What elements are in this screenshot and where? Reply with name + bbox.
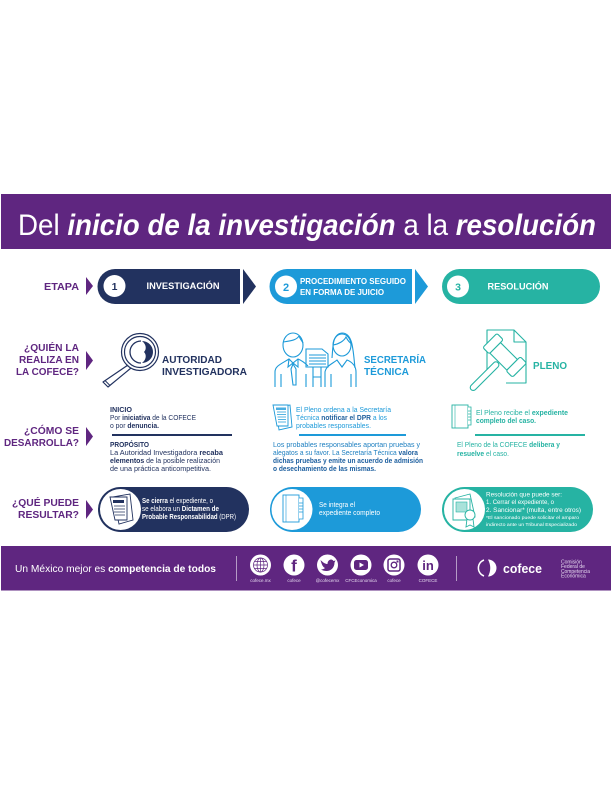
icon: linkedin: in	[422, 558, 434, 573]
row label: quién la realiza	[16, 341, 93, 378]
text block: los probables responsables: alegatos a su favor. La Secretaría Técnica valora	[273, 448, 419, 457]
text block: el pleno recibe: El Pleno recibe el expediente	[476, 408, 568, 417]
row label: quién la realiza: LA COFECE?	[16, 366, 79, 378]
icon: two officials with document	[275, 333, 356, 387]
text: comisión federal de competencia económica: Federal de	[561, 564, 585, 570]
stage 1 arrow: investigación: 1	[112, 281, 118, 293]
text block: propósito: de una práctica anticompetitiva.	[110, 464, 211, 473]
icon: twitter: @cofecemx	[316, 578, 340, 583]
label: pleno: PLENO	[533, 360, 567, 372]
icon: facebook	[284, 554, 304, 583]
stage 1 arrow: investigación	[98, 269, 256, 304]
logo: cofece	[478, 560, 542, 576]
icon: facebook: cofece	[287, 578, 301, 583]
result pill: resolución	[442, 487, 593, 532]
stage 2 arrow: procedimiento seguido en forma de juicio: 2	[283, 282, 289, 294]
divider: investigación	[112, 434, 232, 436]
icon: twitter	[316, 554, 340, 583]
text block: los probables responsables: Los probables responsables aportan pruebas y	[273, 440, 420, 449]
result pill: procedimiento: Se integra el	[319, 502, 355, 509]
text block: el pleno delibera: resuelve el caso.	[457, 449, 509, 458]
result pill: resolución: Resolución que puede ser:	[486, 492, 562, 498]
icon: instagram	[384, 554, 404, 583]
row label: qué puede resultar: ¿QUÉ PUEDE	[12, 496, 79, 509]
text block: los probables responsables	[273, 440, 423, 473]
text block: inicio: Por iniciativa de la COFECE	[110, 413, 196, 422]
row label: qué puede resultar	[12, 496, 93, 521]
icon: certificate with seal	[453, 494, 475, 527]
icon: youtube: CFCEconomica	[345, 578, 377, 583]
text block: el pleno delibera: El Pleno de la COFECE delibera y	[457, 440, 560, 449]
row label: cómo se desarrolla: ¿CÓMO SE	[24, 424, 79, 437]
stage 3 pill: resolución	[442, 269, 600, 304]
icon: document with gavel	[456, 330, 527, 404]
icon: facebook: f	[291, 556, 297, 576]
result pill: resolución: *El sancionado puede solicitar el amparo	[486, 515, 579, 521]
text block: el pleno delibera	[457, 440, 560, 458]
row label: etapa	[44, 277, 93, 295]
result pill: investigación: Probable Responsabilidad (DPR)	[142, 514, 236, 521]
title banner	[1, 194, 611, 249]
stage 2 arrow: procedimiento seguido en forma de juicio: PROCEDIMIENTO SEGUIDO	[300, 276, 406, 286]
label: autoridad investigadora: INVESTIGADORA	[162, 366, 247, 378]
text block: propósito: La Autoridad Investigadora recaba	[110, 448, 224, 457]
label: secretaría técnica	[364, 353, 426, 378]
row label: etapa: ETAPA	[44, 281, 79, 293]
text block: inicio: o por denuncia.	[110, 421, 159, 430]
text block: el pleno ordena: Técnica notificar el DPR a los	[296, 413, 387, 422]
text: comisión federal de competencia económica: Comisión	[561, 560, 582, 566]
row label: cómo se desarrolla: DESARROLLA?	[4, 437, 79, 449]
text block: el pleno ordena: probables responsables.	[296, 421, 371, 430]
label: autoridad investigadora: AUTORIDAD	[162, 354, 222, 366]
label: secretaría técnica: SECRETARÍA	[364, 353, 426, 366]
row label: qué puede resultar: RESULTAR?	[18, 509, 79, 521]
text block: el pleno ordena	[296, 405, 391, 430]
row label: quién la realiza: ¿QUIÉN LA	[24, 341, 79, 354]
slogan: Un México mejor es competencia de todos	[15, 563, 216, 575]
result pill: resolución: indirecto ante un Tribunal Especializado	[486, 522, 577, 528]
text block: el pleno recibe	[476, 408, 568, 425]
icon: linkedin	[418, 554, 438, 583]
icon: DPR document	[110, 494, 133, 524]
divider: procedimiento	[299, 434, 406, 436]
text: comisión federal de competencia económica	[561, 560, 590, 580]
result pill: procedimiento: expediente completo	[319, 510, 380, 517]
title banner: Del inicio de la investigación a la resolución	[18, 209, 596, 242]
icon: magnifying glass	[103, 334, 158, 387]
icon: folder	[283, 495, 303, 522]
icon: folder small	[452, 405, 471, 428]
text block: el pleno ordena: El Pleno ordena a la Secretaría	[296, 405, 391, 414]
stage 2 arrow: procedimiento seguido en forma de juicio	[270, 269, 428, 304]
icon: DPR document small	[273, 405, 292, 430]
icon: youtube	[345, 554, 377, 583]
text: comisión federal de competencia económica: Económica	[561, 574, 586, 580]
label: secretaría técnica: TÉCNICA	[364, 365, 409, 378]
stage 1 arrow: investigación: INVESTIGACIÓN	[146, 280, 220, 292]
text: comisión federal de competencia económica: Competencia	[561, 569, 590, 575]
result pill: investigación	[98, 487, 249, 532]
text block: propósito: PROPÓSITO	[110, 440, 149, 449]
footer band	[1, 546, 611, 590]
label: autoridad investigadora	[162, 354, 247, 378]
stage 3 pill: resolución: RESOLUCIÓN	[488, 280, 549, 292]
icon: web	[250, 554, 271, 583]
stage 2 arrow: procedimiento seguido en forma de juicio: EN FORMA DE JUICIO	[300, 287, 384, 297]
text block: propósito: elementos de la posible realización	[110, 456, 220, 465]
result pill: procedimiento	[270, 487, 421, 532]
icon: web: cofece.mx	[250, 578, 271, 583]
result pill: investigación: se elabora un Dictamen de	[142, 506, 219, 513]
result pill: investigación: Se cierra el expediente, o	[142, 498, 213, 505]
text block: los probables responsables: dichas pruebas y emite un acuerdo de admisión	[273, 456, 423, 465]
icon: instagram: cofece	[387, 578, 401, 583]
text block: los probables responsables: o desechamiento de las mismas.	[273, 464, 376, 473]
row label: cómo se desarrolla	[4, 424, 93, 449]
icon: linkedin: COFECE	[419, 578, 437, 583]
text block: inicio: INICIO	[110, 405, 132, 414]
text block: propósito	[110, 440, 224, 473]
logo: cofece: cofece	[503, 561, 542, 576]
result pill: resolución: 2. Sancionar* (multa, entre otros)	[486, 507, 581, 514]
row label: quién la realiza: REALIZA EN	[19, 354, 79, 366]
stage 3 pill: resolución: 3	[455, 282, 461, 294]
result pill: resolución: 1. Cerrar el expediente, o	[486, 499, 554, 506]
text block: inicio	[110, 405, 196, 430]
text block: el pleno recibe: completo del caso.	[476, 416, 536, 425]
divider: resolución	[475, 434, 585, 436]
